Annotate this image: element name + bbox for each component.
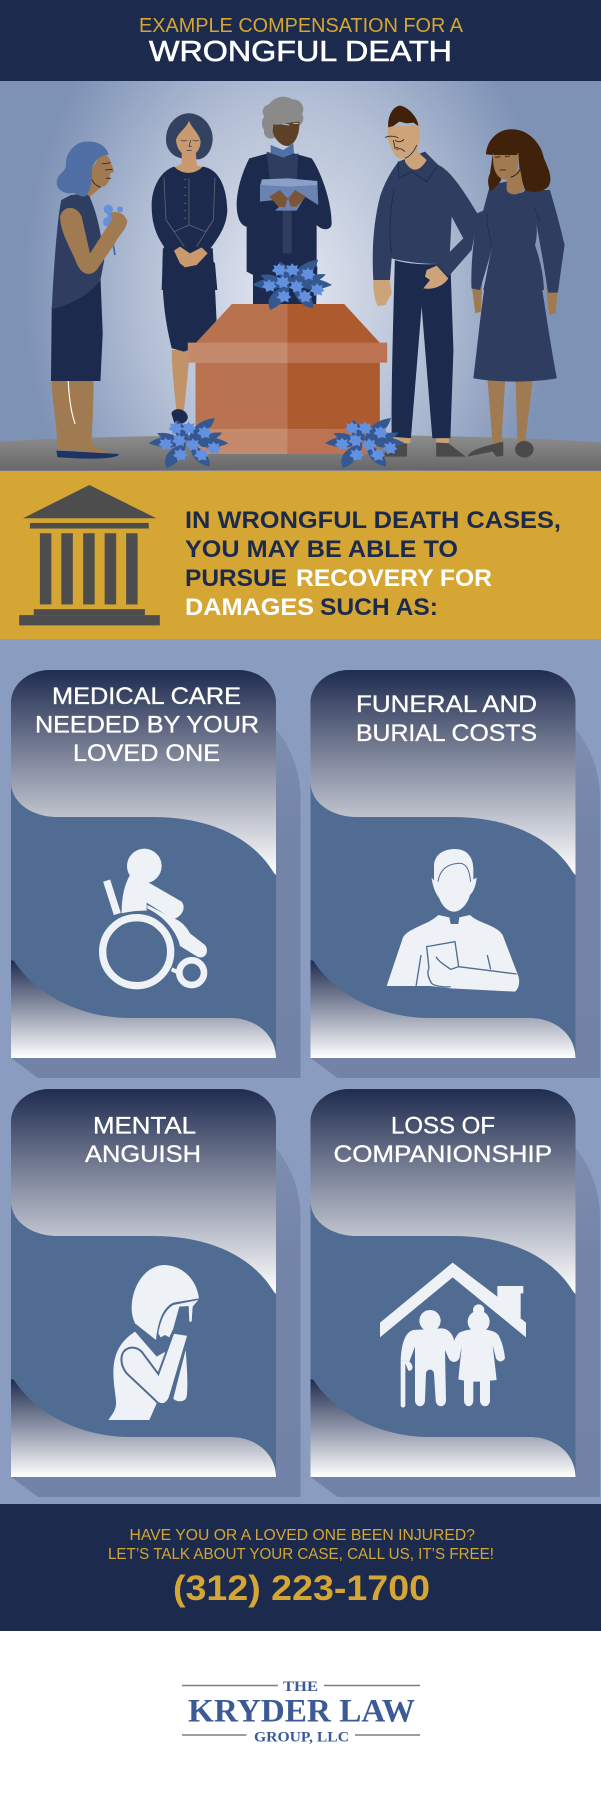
icon: wheelchair (103, 849, 207, 986)
card heading (356, 691, 537, 747)
card heading: LOSS OF (391, 1112, 495, 1140)
card: medical care (11, 670, 300, 1078)
intro text: IN WRONGFUL DEATH CASES, (185, 507, 561, 534)
person: woman with curly brown hair (468, 129, 565, 458)
card: loss of companionship (310, 1089, 600, 1497)
icon: elderly couple under roof (380, 1263, 526, 1407)
card heading: ANGUISH (85, 1141, 201, 1168)
card heading: FUNERAL AND (356, 691, 537, 718)
call to action text: LET’S TALK ABOUT YOUR CASE, CALL US, IT’S FREE! (108, 1546, 494, 1563)
card heading: LOVED ONE (73, 740, 220, 767)
ground (0, 435, 601, 471)
card: funeral and burial costs (310, 670, 600, 1078)
intro text: YOU MAY BE ABLE TO (185, 536, 458, 563)
intro text: SUCH AS: (320, 594, 438, 621)
coffin (188, 304, 387, 454)
intro text: DAMAGES (185, 594, 314, 621)
intro text (185, 507, 561, 621)
card heading: COMPANIONSHIP (334, 1141, 552, 1168)
phone number: (312) 223-1700 (173, 1569, 430, 1608)
icon: clergyman with book (387, 849, 519, 992)
card heading: NEEDED BY YOUR (35, 712, 259, 738)
call to action text: HAVE YOU OR A LOVED ONE BEEN INJURED? (130, 1527, 475, 1544)
intro text: PURSUE (185, 565, 287, 592)
law firm logo (182, 1679, 420, 1746)
card heading: BURIAL COSTS (356, 720, 537, 747)
title main: WRONGFUL DEATH (149, 36, 452, 68)
person: man in sweater (373, 106, 478, 457)
card heading (85, 1112, 201, 1168)
title banner (0, 0, 601, 81)
card: mental anguish (11, 1089, 300, 1497)
damages section background (0, 639, 601, 1504)
flowers right of coffin (325, 418, 405, 468)
card heading: MENTAL (93, 1112, 196, 1140)
funeral scene illustration (0, 81, 601, 471)
call to action text (108, 1527, 494, 1563)
flowers left of coffin (149, 418, 228, 468)
card heading: MEDICAL CARE (52, 683, 241, 710)
gold intro band (0, 471, 601, 639)
call to action banner (0, 1504, 601, 1631)
icon: grieving person (108, 1265, 199, 1420)
title kicker: EXAMPLE COMPENSATION FOR A (139, 15, 464, 37)
law firm logo: GROUP, LLC (254, 1730, 349, 1746)
card heading (35, 683, 259, 767)
law firm logo: KRYDER LAW (188, 1694, 415, 1730)
card heading (334, 1112, 552, 1168)
person: woman with blue hair (51, 141, 127, 459)
law firm logo: THE (283, 1679, 318, 1695)
person: woman with bob haircut (152, 113, 227, 424)
flowers on coffin (252, 260, 332, 310)
icon: courthouse (19, 485, 160, 625)
intro text: RECOVERY FOR (296, 565, 492, 592)
person: grey-haired officiant with book (237, 97, 332, 304)
